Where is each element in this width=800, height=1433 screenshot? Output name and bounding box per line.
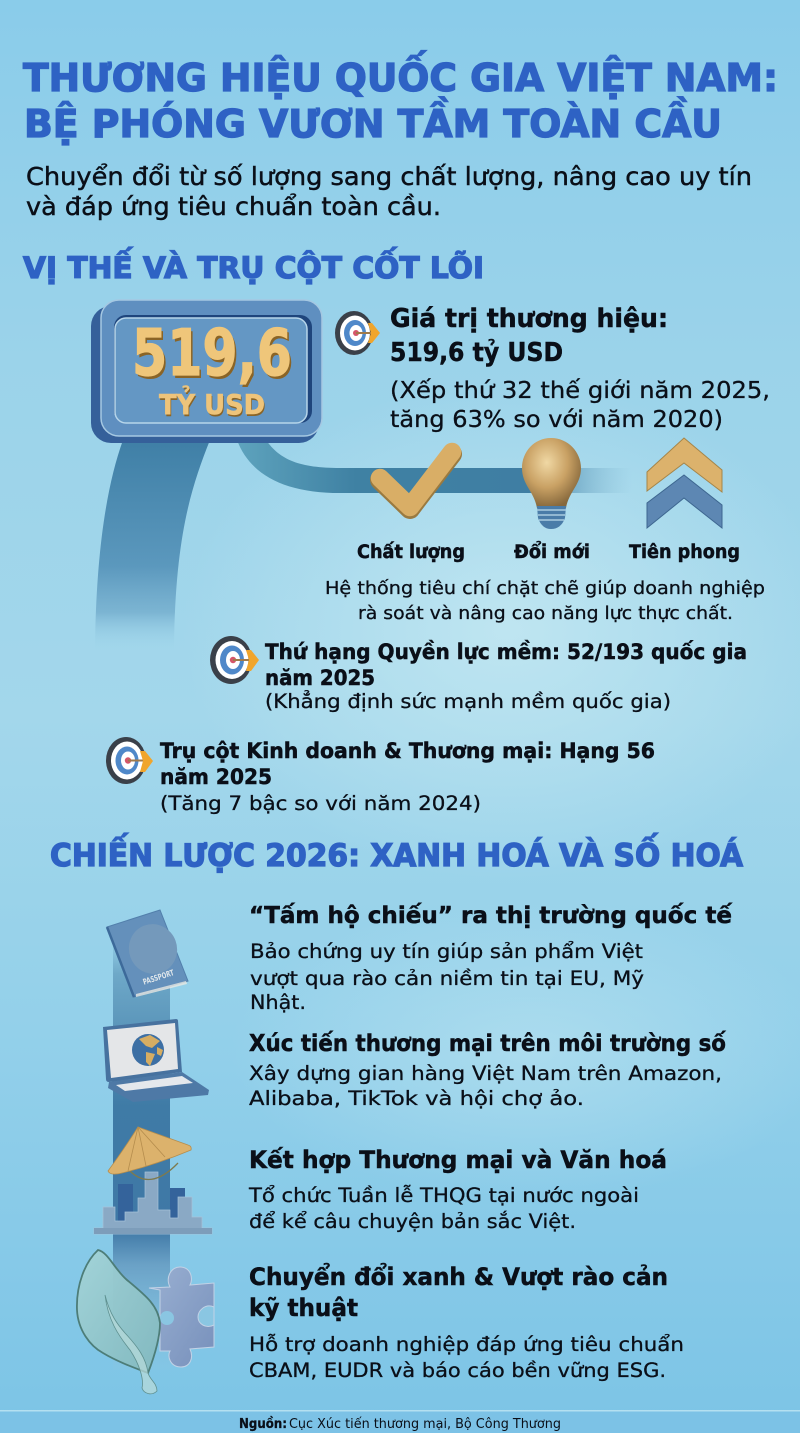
business and trade pillar text: Trụ cột Kinh doanh & Thương mại: Hạng 56 (160, 739, 655, 763)
brand value text (390, 304, 770, 433)
icon: laptop with globe (103, 1019, 209, 1102)
strategy 3: trade and culture (248, 1146, 667, 1233)
value board: TỶ USD (159, 384, 265, 421)
strategy 2: digital trade: Xúc tiến thương mại trên môi trường số (249, 1030, 726, 1057)
heading: positioning and core pillars: VỊ THẾ VÀ TRỤ CỘT CỐT LÕI (23, 247, 484, 285)
criteria description (325, 578, 765, 624)
strategy 3: trade and culture: Tổ chức Tuần lễ THQG tại nước ngoài (248, 1184, 639, 1207)
brand value text: (Xếp thứ 32 thế giới năm 2025, (390, 378, 770, 404)
branch connector (237, 440, 632, 493)
icon: light bulb (522, 438, 581, 529)
icon: passport: PASSPORT (142, 968, 175, 987)
soft power ranking text: (Khẳng định sức mạnh mềm quốc gia) (265, 690, 671, 713)
title: THƯƠNG HIỆU QUỐC GIA VIỆT NAM: (23, 51, 778, 100)
business and trade pillar text (160, 739, 655, 815)
soft power ranking text (265, 640, 747, 713)
strategy 2: digital trade: Xây dựng gian hàng Việt Nam trên Amazon, (249, 1062, 722, 1085)
icon: target 1 (335, 311, 380, 355)
strategy column (113, 930, 170, 1370)
heading: 2026 strategy: CHIẾN LƯỢC 2026: XANH HOÁ VÀ SỐ HOÁ (50, 833, 743, 874)
strategy 4: green transition: kỹ thuật (249, 1294, 358, 1322)
value board (91, 300, 322, 443)
strategy 2: digital trade (249, 1030, 726, 1110)
icon: glass leaf (77, 1250, 160, 1394)
board value: 519,6 (134, 320, 294, 394)
value board: TỶ USD (160, 386, 266, 423)
strategy 1: passport: vượt qua rào cản niềm tin tại EU, Mỹ (250, 967, 644, 990)
strategy 3: trade and culture: Kết hợp Thương mại và Văn hoá (249, 1146, 667, 1174)
strategy 1: passport: Bảo chứng uy tín giúp sản phẩm Việt (250, 940, 643, 963)
icon: conical hat over city skyline (94, 1127, 212, 1234)
criteria description: Hệ thống tiêu chí chặt chẽ giúp doanh nghiệp (325, 578, 765, 599)
source footer: Nguồn: (239, 1417, 287, 1432)
brand value text: tăng 63% so với năm 2020) (390, 407, 723, 433)
strategy 4: green transition: CBAM, EUDR và báo cáo bền vững ESG. (249, 1359, 666, 1382)
subtitle: và đáp ứng tiêu chuẩn toàn cầu. (26, 192, 441, 221)
icon: target 2 (210, 636, 259, 684)
icon: passport (107, 910, 188, 997)
strategy 4: green transition: Hỗ trợ doanh nghiệp đáp ứng tiêu chuẩn (249, 1333, 684, 1356)
brand value text: 519,6 tỷ USD (390, 338, 563, 368)
value board: 519,6 (132, 317, 292, 391)
strategy 4: green transition (249, 1261, 684, 1382)
icon: target 3 (106, 737, 153, 784)
title (23, 51, 778, 146)
business and trade pillar text: (Tăng 7 bậc so với năm 2024) (160, 792, 481, 815)
source footer (0, 1410, 800, 1433)
title: BỆ PHÓNG VƯƠN TẦM TOÀN CẦU (24, 97, 722, 146)
brand value text: Giá trị thương hiệu: (390, 304, 668, 334)
strategy 1: passport: “Tấm hộ chiếu” ra thị trường quốc tế (249, 901, 733, 929)
pillar labels: Chất lượng (357, 542, 465, 563)
criteria description: rà soát và nâng cao năng lực thực chất. (358, 603, 733, 624)
icon: double chevron up (647, 438, 722, 528)
strategy 2: digital trade: Alibaba, TikTok và hội chợ ảo. (249, 1087, 584, 1110)
icon: puzzle piece (149, 1267, 214, 1367)
pillar labels: Đổi mới (514, 541, 590, 563)
soft power ranking text: năm 2025 (265, 666, 375, 690)
pillar labels (357, 541, 740, 563)
subtitle: Chuyển đổi từ số lượng sang chất lượng, nâng cao uy tín (26, 162, 752, 191)
pillar labels: Tiên phong (629, 542, 740, 563)
strategy 4: green transition: Chuyển đổi xanh & Vượt rào cản (249, 1261, 668, 1291)
subtitle (26, 162, 752, 221)
business and trade pillar text: năm 2025 (160, 765, 272, 789)
strategy 1: passport (249, 901, 733, 1014)
strategy 1: passport: Nhật. (250, 991, 306, 1014)
soft power ranking text: Thứ hạng Quyền lực mềm: 52/193 quốc gia (265, 640, 747, 664)
icon: check mark (380, 452, 452, 509)
pillar column below the value board (95, 440, 210, 650)
source footer: Cục Xúc tiến thương mại, Bộ Công Thương (289, 1417, 561, 1432)
strategy 3: trade and culture: để kể câu chuyện bản sắc Việt. (249, 1210, 576, 1233)
